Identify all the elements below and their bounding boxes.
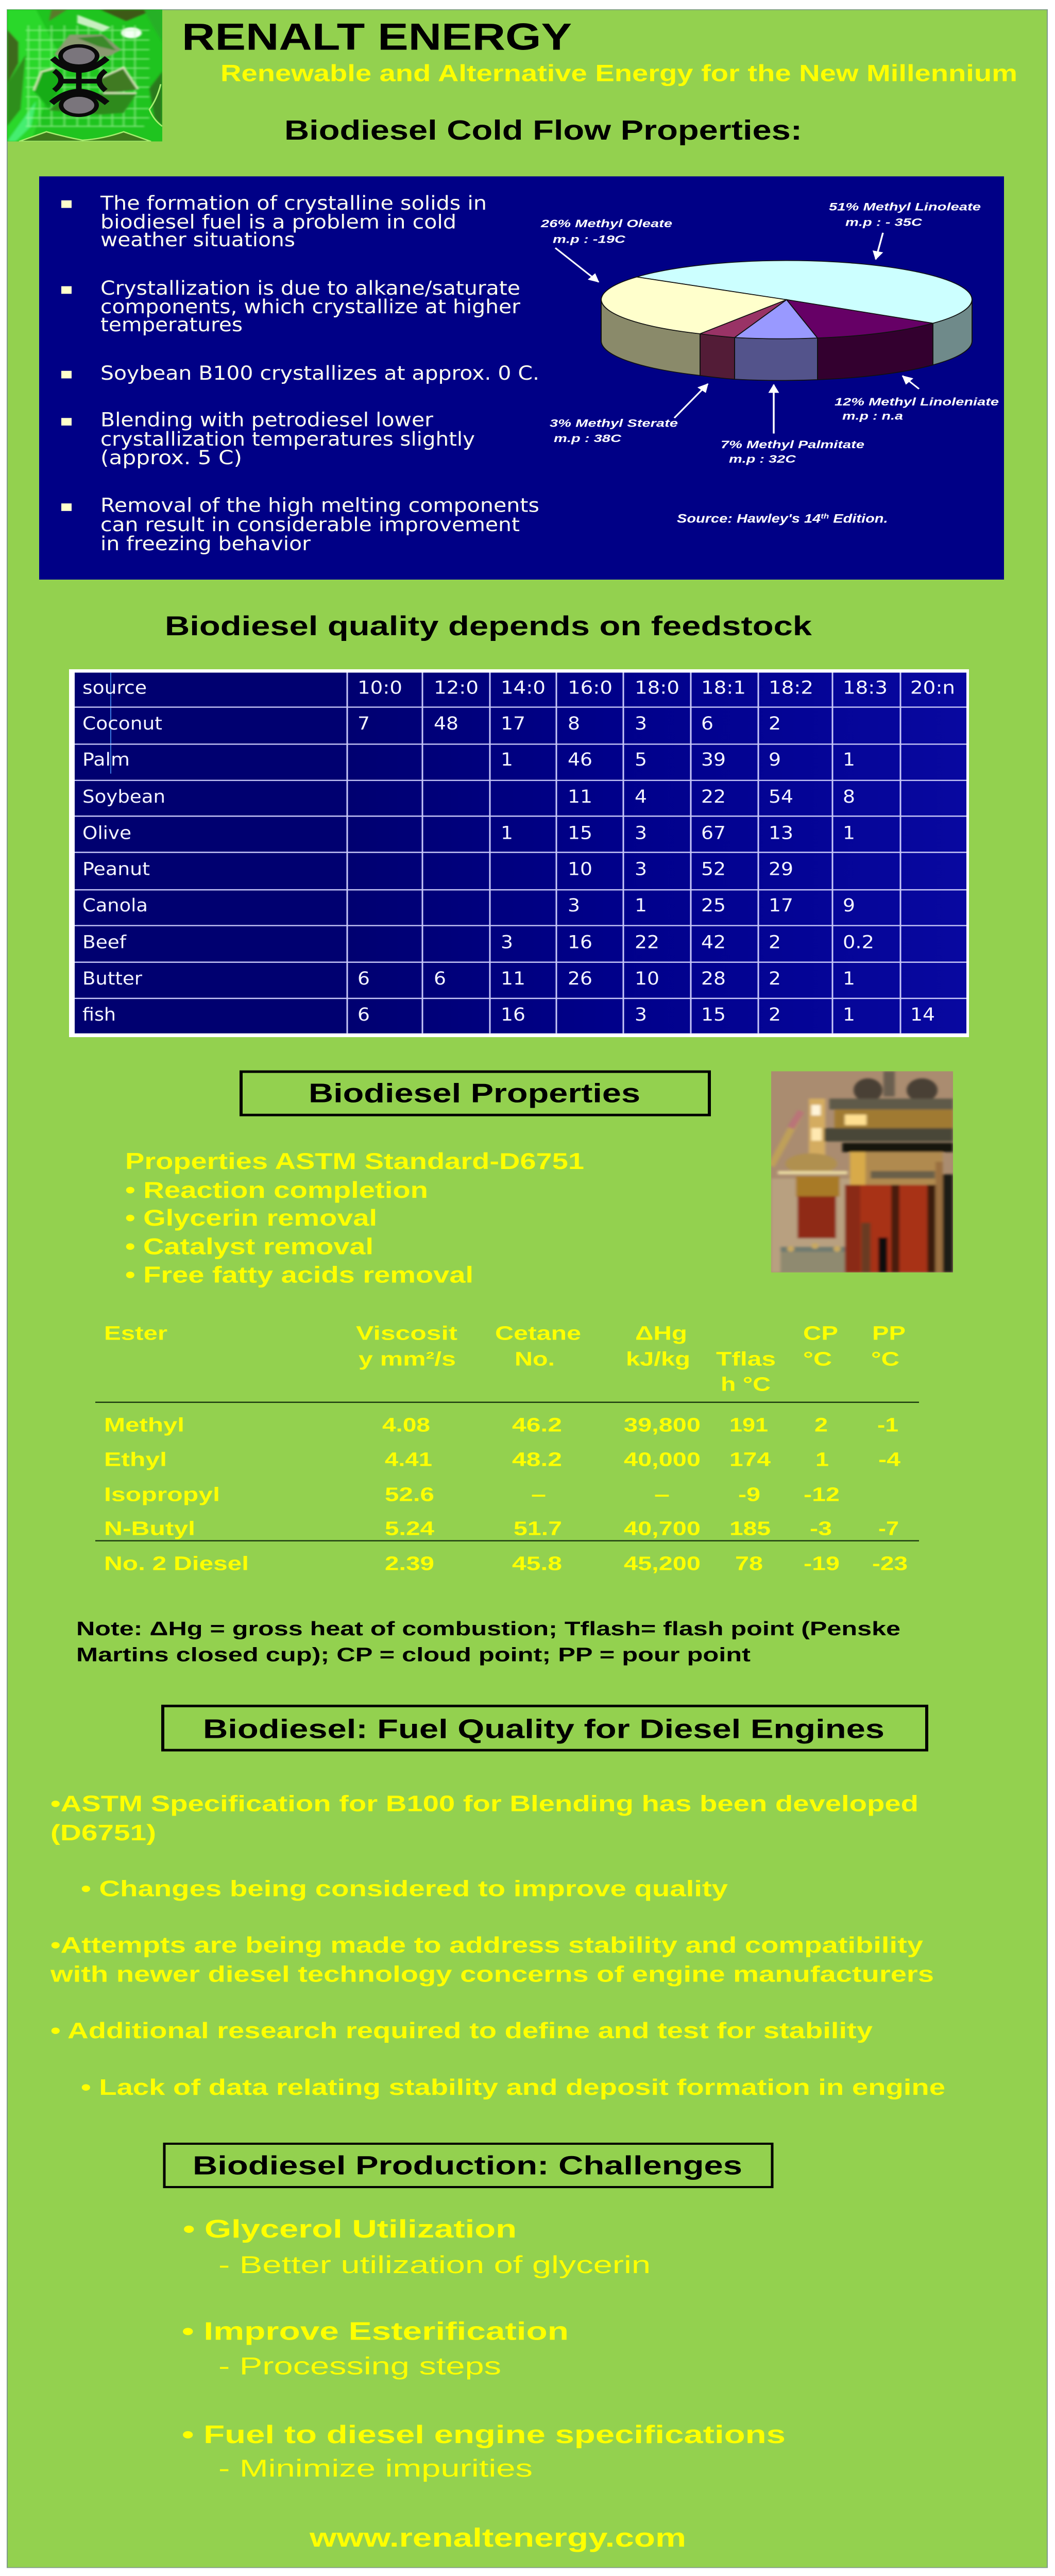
table row: beef: 16 <box>568 932 592 953</box>
labels: pie slices: m.p : 32C <box>729 453 796 465</box>
table row: n-butyl: -7 <box>878 1518 899 1539</box>
subtitle: tagline: Renewable and Alternative Energy for the New Millennium <box>220 60 1017 87</box>
text block: cold flow bullets: Removal of the high melting components <box>100 494 539 516</box>
heading box: Biodiesel Properties <box>241 1072 709 1115</box>
panel: cold flow slide <box>39 176 1004 580</box>
text block: ASTM properties list: Properties ASTM Standard-D6751 <box>125 1148 584 1174</box>
table row: canola <box>82 895 855 916</box>
text block: cold flow bullets: weather situations <box>100 228 295 251</box>
table row: ethyl: 174 <box>729 1449 771 1470</box>
table row: butter: 28 <box>701 969 726 989</box>
table row: no. 2 diesel: 45,200 <box>624 1552 701 1574</box>
text block: production challenges: • Glycerol Utilization <box>183 2214 517 2243</box>
table row: soybean: 54 <box>769 787 793 807</box>
table row: no. 2 diesel <box>104 1552 908 1574</box>
table row: ethyl: -4 <box>878 1449 901 1470</box>
table row: butter: 6 <box>434 969 446 989</box>
table row: fish: 6 <box>358 1005 370 1025</box>
table row: beef <box>82 932 874 953</box>
table row: header: 10:0 <box>358 677 402 698</box>
text block: production challenges: • Fuel to diesel engine specifications <box>182 2420 786 2449</box>
table row: fish: 2 <box>769 1005 781 1025</box>
table row: butter: 11 <box>501 969 525 989</box>
text block: ASTM properties list: • Glycerin removal <box>125 1206 377 1231</box>
table row: beef: 3 <box>501 932 513 953</box>
text block: ASTM properties list: • Reaction completion <box>125 1178 428 1203</box>
table row: methyl: 39,800 <box>624 1414 701 1436</box>
table row: header: source <box>82 677 147 698</box>
heading box: Production Challenges <box>164 2144 772 2187</box>
labels: pie slices: 51% Methyl Linoleate <box>829 201 981 213</box>
table row: coconut <box>82 714 781 734</box>
chart: 3D pie of methyl esters <box>601 261 972 380</box>
table row: n-butyl: 5.24 <box>385 1518 435 1539</box>
table row: ethyl: 48.2 <box>512 1449 562 1470</box>
table row: fish: 16 <box>501 1005 525 1025</box>
source note: Edition. <box>829 512 888 526</box>
table row: butter <box>82 969 855 989</box>
table: fatty acid composition by feedstock <box>69 669 969 1037</box>
footer: website: www.renaltenergy.com <box>309 2523 686 2552</box>
table row: methyl: 2 <box>814 1414 828 1436</box>
table row: canola: 3 <box>568 895 580 916</box>
table row: butter: 10 <box>635 969 659 989</box>
table row: palm: 5 <box>635 750 647 770</box>
table row: fish: 14 <box>910 1005 935 1025</box>
labels: pie slices: m.p : - 35C <box>845 217 923 229</box>
table row: butter: 1 <box>843 969 855 989</box>
table header: CP <box>803 1322 838 1344</box>
table row: olive: 67 <box>701 823 726 843</box>
table header: h °C <box>721 1373 771 1395</box>
table row: header: 14:0 <box>501 677 546 698</box>
table row: fish: 15 <box>701 1005 726 1025</box>
table row: isopropyl <box>104 1483 840 1505</box>
labels: pie slices: 26% Methyl Oleate <box>540 218 672 230</box>
table row: ethyl <box>104 1449 901 1470</box>
table row: olive: 13 <box>769 823 793 843</box>
table row: no. 2 diesel: -19 <box>804 1552 840 1574</box>
table row: olive: 15 <box>568 823 592 843</box>
table row: olive: 3 <box>635 823 647 843</box>
table row: peanut: 29 <box>769 859 793 879</box>
table row: coconut: 48 <box>434 714 458 734</box>
labels: pie slices: m.p : n.a <box>842 411 903 422</box>
table row: n-butyl: -3 <box>810 1518 832 1539</box>
table row: header: 18:1 <box>701 677 746 698</box>
table row: methyl: 191 <box>729 1414 768 1436</box>
table row: header: 16:0 <box>568 677 612 698</box>
heading box: Production Challenges: Biodiesel Production: Challenges <box>193 2151 742 2180</box>
text block: production challenges: - Better utilization of glycerin <box>218 2251 651 2279</box>
text block: ASTM properties list <box>125 1148 584 1287</box>
text block: cold flow bullets: Blending with petrodiesel lower <box>100 409 434 431</box>
heading: cold flow properties: Biodiesel Cold Flow Properties: <box>284 114 802 146</box>
table row: peanut: Peanut <box>82 859 150 879</box>
text block: fuel quality bullets: • Lack of data relating stability and deposit formation in engine <box>81 2075 945 2100</box>
table row: beef: 2 <box>769 932 781 953</box>
text block: ASTM properties list: • Free fatty acids removal <box>125 1262 473 1287</box>
table row: fish <box>82 1005 935 1025</box>
table row: butter: 6 <box>358 969 370 989</box>
table row: butter: 26 <box>568 969 592 989</box>
heading: feedstock quality: Biodiesel quality depends on feedstock <box>165 611 812 641</box>
table row: n-butyl: 40,700 <box>624 1518 701 1539</box>
table row: coconut: 3 <box>635 714 647 734</box>
table row: soybean: 4 <box>635 787 647 807</box>
text block: fuel quality bullets: • Changes being considered to improve quality <box>81 1876 728 1901</box>
table row: coconut: 2 <box>769 714 781 734</box>
text block: fuel quality bullets <box>50 1791 945 2100</box>
table row: soybean: 8 <box>843 787 855 807</box>
table row: coconut: 7 <box>358 714 370 734</box>
table row: olive: 1 <box>843 823 855 843</box>
table row: beef: 22 <box>635 932 659 953</box>
table row: isopropyl: Isopropyl <box>104 1483 220 1505</box>
text block: cold flow bullets: can result in considerable improvement <box>100 513 520 536</box>
table header: Cetane <box>495 1322 581 1344</box>
table row: fish: fish <box>82 1005 116 1025</box>
text block: cold flow bullets: The formation of crystalline solids in <box>100 192 487 214</box>
source note: Source: Hawley's 14 <box>677 512 821 526</box>
table header: Tflas <box>716 1348 776 1369</box>
table row: ethyl: 4.41 <box>385 1449 432 1470</box>
table row: header: 20:n <box>910 677 955 698</box>
table row: n-butyl: 185 <box>729 1518 771 1539</box>
text block: cold flow bullets <box>61 192 539 555</box>
table header <box>104 1322 906 1395</box>
table header: PP <box>872 1322 906 1344</box>
text block: fuel quality bullets: with newer diesel technology concerns of engine manufacturers <box>50 1962 934 1987</box>
table row: olive: Olive <box>82 823 131 843</box>
table row: no. 2 diesel: No. 2 Diesel <box>104 1552 249 1574</box>
table row: palm: 9 <box>769 750 781 770</box>
heading box: Fuel Quality for Diesel Engines <box>163 1706 927 1750</box>
table row: n-butyl <box>104 1518 899 1539</box>
table row: peanut: 3 <box>635 859 647 879</box>
table row: methyl: 46.2 <box>512 1414 562 1436</box>
table row: fish: 3 <box>635 1005 647 1025</box>
table row: canola: 25 <box>701 895 726 916</box>
labels: pie slices: 7% Methyl Palmitate <box>721 439 864 451</box>
table row: beef: 42 <box>701 932 726 953</box>
table row: isopropyl: -9 <box>738 1483 760 1505</box>
table row: peanut: 52 <box>701 859 726 879</box>
table row: peanut <box>82 859 793 879</box>
text block: cold flow bullets: biodiesel fuel is a problem in cold <box>100 211 456 233</box>
note: table abbreviations <box>76 1618 900 1666</box>
table row: soybean: Soybean <box>82 787 165 807</box>
text block: production challenges: • Improve Esterification <box>182 2317 569 2345</box>
table row: soybean <box>82 787 855 807</box>
text block: fuel quality bullets: (D6751) <box>50 1820 156 1845</box>
table row: palm: 39 <box>701 750 726 770</box>
table row: olive <box>82 823 855 843</box>
table row: palm <box>82 750 855 770</box>
table header: Viscosit <box>356 1322 457 1344</box>
table row: butter: Butter <box>82 969 142 989</box>
labels: pie slices: 12% Methyl Linoleniate <box>835 396 999 408</box>
table header: kJ/kg <box>626 1348 690 1369</box>
table row: fish: 1 <box>843 1005 855 1025</box>
table row: methyl: Methyl <box>104 1414 184 1436</box>
labels: pie slices: m.p : -19C <box>553 234 626 246</box>
table row: no. 2 diesel: -23 <box>872 1552 908 1574</box>
table row: palm: 46 <box>568 750 592 770</box>
text block: cold flow bullets: crystallization temperatures slightly <box>100 428 475 450</box>
table row: header: 18:3 <box>843 677 888 698</box>
table row: ethyl: 40,000 <box>624 1449 701 1470</box>
text block: ASTM properties list: • Catalyst removal <box>125 1234 373 1259</box>
table row: ethyl: Ethyl <box>104 1449 167 1470</box>
table row: isopropyl: – <box>531 1483 546 1505</box>
labels: pie slices: m.p : 38C <box>554 433 622 445</box>
arrows: pie callouts <box>555 233 919 434</box>
table: ester properties <box>95 1322 919 1574</box>
table row: ethyl: 1 <box>815 1449 829 1470</box>
text block: cold flow bullets: (approx. 5 C) <box>100 446 242 469</box>
text block: cold flow bullets: Crystallization is due to alkane/saturate <box>100 277 520 299</box>
table row: beef: 0.2 <box>843 932 874 953</box>
text block: fuel quality bullets: • Additional research required to define and test for stability <box>50 2018 873 2043</box>
text block: fuel quality bullets: •Attempts are being made to address stability and compatibility <box>50 1933 923 1958</box>
labels: pie slices: 3% Methyl Sterate <box>550 418 678 430</box>
table row: isopropyl: 52.6 <box>385 1483 434 1505</box>
table header: °C <box>871 1348 899 1369</box>
table row: beef: Beef <box>82 932 127 953</box>
image: biodiesel reactor photo <box>771 1071 953 1273</box>
source note: th <box>821 513 829 520</box>
table row: n-butyl: N-Butyl <box>104 1518 195 1539</box>
heading box: Biodiesel Properties: Biodiesel Properties <box>309 1079 640 1108</box>
text block: production challenges: - Processing steps <box>218 2353 501 2380</box>
table row: no. 2 diesel: 78 <box>735 1552 763 1574</box>
text block: fuel quality bullets: •ASTM Specification for B100 for Blending has been developed <box>50 1791 918 1816</box>
table row: coconut: 8 <box>568 714 580 734</box>
table row: coconut: 17 <box>501 714 525 734</box>
table row: methyl <box>104 1414 898 1436</box>
table row: methyl: 4.08 <box>382 1414 430 1436</box>
table row: canola: Canola <box>82 895 148 916</box>
table row: canola: 1 <box>635 895 647 916</box>
icon: Renalt Energy logo <box>7 10 162 142</box>
labels: pie slices <box>540 201 999 465</box>
table row: header <box>82 677 955 698</box>
text block: cold flow bullets: in freezing behavior <box>100 532 311 555</box>
note: table abbreviations: Martins closed cup); CP = cloud point; PP = pour point <box>76 1644 751 1666</box>
table row: palm: Palm <box>82 750 130 770</box>
table row: peanut: 10 <box>568 859 592 879</box>
table row: n-butyl: 51.7 <box>514 1518 562 1539</box>
text block: production challenges: - Minimize impurities <box>218 2455 533 2482</box>
table row: header: 18:2 <box>769 677 813 698</box>
text block: cold flow bullets: components, which crystallize at higher <box>100 295 521 318</box>
table row: methyl: -1 <box>877 1414 898 1436</box>
table row: no. 2 diesel: 45.8 <box>512 1552 562 1574</box>
text block: cold flow bullets: Soybean B100 crystallizes at approx. 0 C. <box>100 362 539 384</box>
table row: soybean: 11 <box>568 787 592 807</box>
text block: cold flow bullets: temperatures <box>100 313 243 336</box>
table header: y mm²/s <box>359 1348 456 1369</box>
table header: ΔHg <box>635 1322 687 1344</box>
table row: no. 2 diesel: 2.39 <box>385 1552 434 1574</box>
heading box: Fuel Quality for Diesel Engines: Biodiesel: Fuel Quality for Diesel Engines <box>203 1715 884 1744</box>
table header: Ester <box>104 1322 167 1344</box>
table row: isopropyl: -12 <box>804 1483 840 1505</box>
table row: canola: 17 <box>769 895 793 916</box>
table row: coconut: 6 <box>701 714 713 734</box>
table row: header: 12:0 <box>434 677 479 698</box>
note: table abbreviations: Note: ΔHg = gross heat of combustion; Tflash= flash point (Penske <box>76 1618 900 1639</box>
table row: coconut: Coconut <box>82 714 162 734</box>
title: Renalt Energy: RENALT ENERGY <box>182 16 572 58</box>
table row: isopropyl: – <box>654 1483 670 1505</box>
table row: palm: 1 <box>501 750 513 770</box>
table row: canola: 9 <box>843 895 855 916</box>
table row: soybean: 22 <box>701 787 726 807</box>
table header: °C <box>803 1348 832 1369</box>
text block: production challenges <box>182 2214 786 2482</box>
table row: butter: 2 <box>769 969 781 989</box>
table row: olive: 1 <box>501 823 513 843</box>
table header: No. <box>515 1348 555 1369</box>
table row: header: 18:0 <box>635 677 679 698</box>
table row: palm: 1 <box>843 750 855 770</box>
